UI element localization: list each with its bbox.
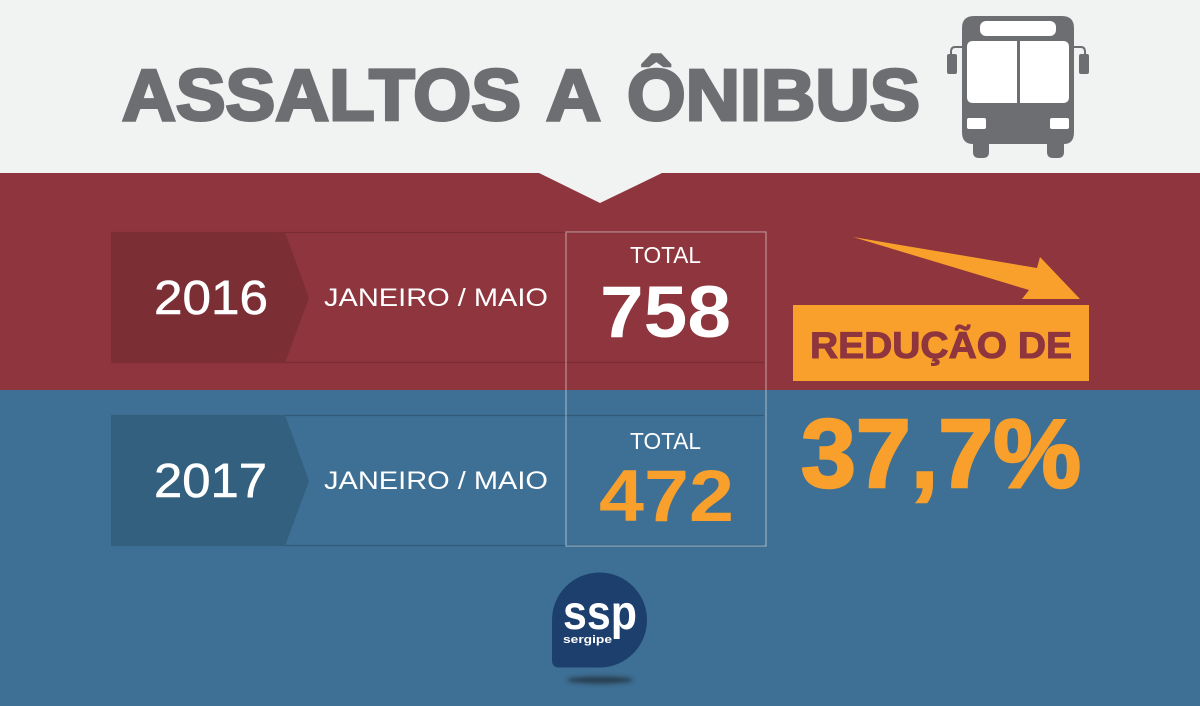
callout: reduction label: REDUÇÃO DE: [810, 324, 1072, 366]
logo shadow: [567, 676, 633, 684]
value: reduction percent: 37,7%: [801, 399, 1081, 508]
title: ÔNIBUS: [627, 55, 920, 136]
logo: SSP Sergipe: [552, 573, 647, 684]
label total 2016: TOTAL: [630, 242, 701, 268]
period 2016: JANEIRO / MAIO: [324, 284, 548, 312]
logo subtitle: sergipe: [563, 634, 612, 646]
panel: 2016 red band: [0, 173, 1200, 390]
year 2016: 2016: [154, 272, 268, 325]
value 758: 758: [600, 272, 731, 353]
label total 2017: TOTAL: [630, 428, 701, 454]
year arrow 2016: [111, 232, 309, 363]
panel: row 2017: [111, 415, 764, 546]
callout: reduction label: [793, 305, 1089, 381]
year 2017: 2017: [154, 455, 267, 508]
period 2017: JANEIRO / MAIO: [324, 467, 548, 495]
title: [122, 55, 920, 136]
icon: bus: [947, 16, 1089, 158]
value 472: 472: [599, 456, 734, 537]
arrow: downward reduction: [853, 237, 1080, 299]
title: ASSALTOS: [122, 56, 521, 136]
total column frame: [566, 232, 766, 546]
panel: 2017 blue band: [0, 390, 1200, 706]
panel: title header with pointer: [0, 0, 1200, 203]
row outline: [111, 416, 764, 546]
title: A: [546, 56, 601, 136]
logo badge: [552, 573, 647, 668]
panel: row 2016: [111, 232, 764, 363]
row outline: [111, 232, 764, 362]
logo wordmark: ssp: [563, 587, 637, 640]
year arrow 2017: [111, 415, 309, 546]
